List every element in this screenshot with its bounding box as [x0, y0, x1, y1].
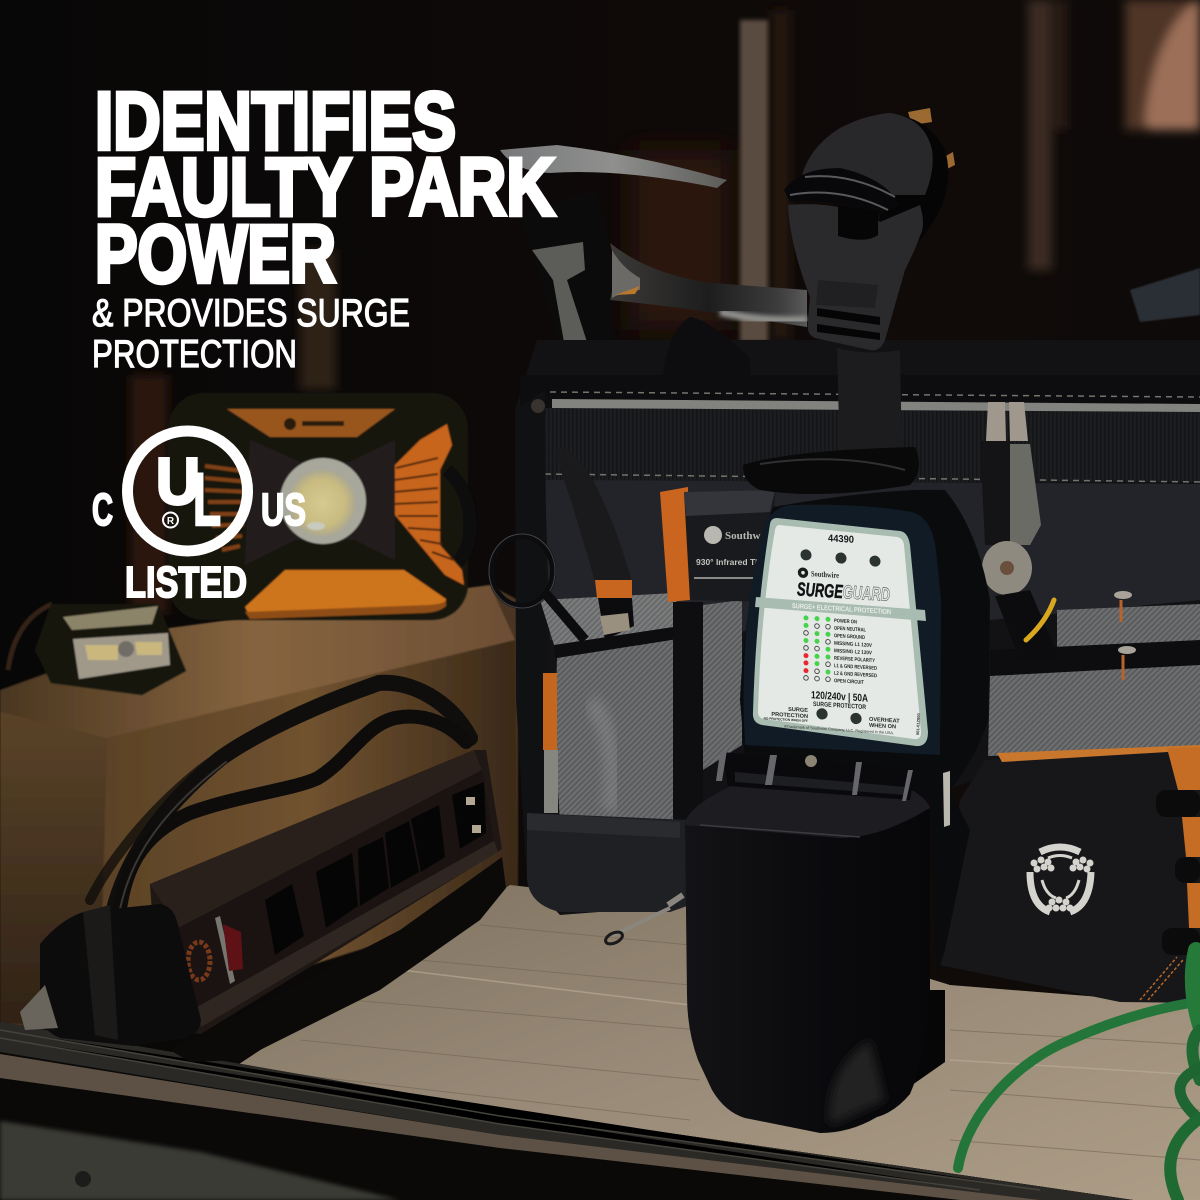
metal lower rail [0, 1121, 400, 1200]
model number: 44390 [828, 533, 854, 546]
work light brand mark [284, 418, 344, 430]
bag rivet [531, 399, 545, 413]
bag base [527, 813, 690, 912]
pouch with logo [940, 745, 1200, 1003]
strip logo [188, 942, 210, 980]
device lid lower reflection [830, 1040, 885, 1125]
surge protection caption [764, 705, 808, 723]
hammer pick head [500, 145, 727, 188]
rating caption: SURGE PROTECTOR [813, 701, 866, 711]
bag zipper stripe [552, 399, 1200, 412]
plier tips [986, 402, 1028, 441]
ul ring [128, 431, 248, 551]
strip mat [170, 857, 506, 1062]
ul listed badge: L [193, 458, 221, 541]
plier pivot [982, 541, 1032, 595]
surge protection caption: NO PROTECTION WHEN OFF [764, 716, 808, 723]
bag middle mesh pocket [703, 600, 742, 770]
background pillar [740, 20, 768, 342]
thermometer brand: Southw [725, 530, 761, 542]
plier left jaw [980, 441, 1012, 545]
bag back gray tube [1130, 268, 1200, 322]
pouch orange trim [997, 745, 1200, 762]
bag left strap [515, 390, 548, 860]
subheading: PROTECTION [92, 333, 297, 376]
pliers [980, 402, 1060, 660]
rubber seal [0, 1022, 1133, 1200]
device hinges [716, 750, 913, 801]
wooden floor [230, 885, 1200, 1200]
strip end cap [40, 904, 201, 1046]
device hinge bar [722, 752, 915, 800]
work light handle [447, 470, 470, 562]
us mark: US [261, 484, 306, 535]
overheat caption [869, 717, 900, 731]
bag webbing [545, 408, 1200, 482]
device side sticker [943, 771, 950, 827]
plug slots [817, 308, 880, 340]
thermometer orange grip [660, 487, 690, 602]
device screw [805, 755, 817, 767]
pouch black loops [1156, 790, 1200, 955]
bag rivet stems [1121, 600, 1123, 680]
c mark: C [92, 484, 113, 535]
device collar [743, 447, 919, 494]
strip usb ports [466, 797, 481, 833]
led labels: MISSING L2 120V [834, 648, 872, 656]
bag stitch lines [523, 392, 1200, 800]
headline [95, 76, 555, 300]
led labels: POWER ON [834, 618, 857, 626]
lower indicators [816, 708, 862, 724]
small lantern [8, 604, 186, 695]
bag left seam [554, 626, 682, 660]
work light lens [280, 458, 366, 544]
rating: 120/240v | 50A [811, 689, 868, 705]
led labels: OPEN CIRCUIT [834, 678, 865, 686]
pouch logo [1030, 847, 1094, 912]
device label contents [764, 529, 900, 736]
knife orange band [595, 580, 632, 598]
second hammer [610, 243, 807, 327]
crate top face [0, 585, 515, 738]
plug dome [800, 113, 933, 195]
thermometer body [684, 490, 775, 602]
bag hand strap [663, 317, 750, 375]
strip top face [150, 750, 482, 928]
knife handle [557, 447, 632, 582]
surge protection caption: SURGE [788, 707, 808, 714]
overheat caption: OVERHEAT [869, 717, 900, 725]
work light x frame [245, 440, 395, 565]
led labels: REVERSE POLARITY [834, 656, 875, 664]
overheat caption: WHEN ON [869, 723, 896, 730]
bag vertical strap [673, 602, 703, 880]
bag right upper mesh [1057, 604, 1200, 652]
led grid [804, 615, 830, 682]
strip body [150, 750, 502, 1034]
bag light lower trim [544, 750, 558, 813]
knife clasp [600, 613, 630, 635]
bag top black band [520, 375, 1200, 412]
work light [168, 393, 470, 620]
chisel blade [532, 242, 598, 376]
bag body [515, 340, 1200, 915]
cords [90, 680, 470, 928]
top indicators [800, 549, 880, 567]
device cord [837, 348, 902, 462]
bag right seam [990, 640, 1200, 680]
listed caption: LISTED [125, 558, 247, 607]
southwire wordmark: Southwire [811, 569, 839, 580]
rail screw [75, 1171, 91, 1187]
tool bag [515, 268, 1200, 915]
subheading [92, 292, 410, 376]
wooden crate [0, 585, 518, 1030]
green extension cord [958, 950, 1200, 1200]
strip lower rail [197, 841, 498, 1027]
thermometer label: 930° Infrared Th [696, 557, 760, 567]
bag upper pocket [545, 480, 1200, 640]
surgeguard logo: SURGEGUARD [797, 579, 890, 606]
thermometer tool [660, 487, 775, 602]
plier yellow grip [1026, 600, 1054, 640]
led labels: OPEN NEUTRAL [834, 626, 867, 634]
plier handles [995, 590, 1060, 660]
power strip with cords [20, 680, 506, 1062]
bag left mesh pocket [556, 638, 684, 825]
surge guard device [685, 108, 990, 1133]
device side shell [740, 490, 990, 975]
work light bottom orange panel [245, 570, 446, 617]
bag orange trim [543, 673, 557, 750]
device plug head [784, 108, 955, 350]
led labels: OPEN GROUND [834, 633, 865, 641]
headline: IDENTIFIES [95, 76, 456, 167]
crate front face [0, 712, 107, 1024]
work light top orange panel [227, 409, 395, 437]
work light right fins [394, 424, 464, 585]
ul letters: U [156, 444, 200, 518]
plug socket hole [838, 205, 878, 240]
work light left fins [205, 466, 250, 550]
strip outlets [265, 782, 486, 955]
device panel frame [744, 505, 941, 755]
scissor ring [491, 536, 553, 606]
plug face [788, 204, 923, 350]
device label inner [758, 525, 921, 739]
part number: 561-01Z900 [915, 712, 921, 735]
plier right jaw [1010, 444, 1041, 545]
hammer and chisel [500, 145, 807, 376]
plug back [880, 114, 948, 260]
led labels: L2 & GND REVERSED [834, 671, 877, 679]
band caption: SURGE+ ELECTRICAL PROTECTION [792, 603, 891, 616]
trademark line: ®Trademark of Southwire Company, LLC. Registered in the USA. [784, 725, 894, 735]
device lid [685, 785, 930, 1133]
bag rivets [1114, 591, 1136, 654]
strip face [178, 770, 494, 1007]
device lid highlight [700, 825, 860, 837]
carabiner clip [604, 895, 683, 946]
strip red switch [223, 924, 243, 971]
plug ratings plate [816, 280, 878, 308]
hammer neck [520, 190, 612, 376]
pouch orange stitching [1140, 957, 1183, 1000]
headline block [92, 76, 555, 376]
sandy edge strip [0, 1054, 1040, 1200]
ul listed badge [92, 431, 306, 607]
device rear foot [905, 990, 945, 1090]
led labels: MISSING L1 120V [834, 641, 872, 649]
thermometer logo [704, 526, 722, 544]
led labels [834, 618, 877, 687]
strip end plug [20, 985, 58, 1030]
crate side face [100, 640, 518, 1000]
bag right mesh pocket [988, 665, 1200, 756]
headline: POWER [95, 209, 336, 300]
rail dark base [0, 1022, 1133, 1200]
device label outer [753, 518, 928, 746]
led labels: L1 & GND REVERSED [834, 663, 877, 672]
utility knife and scissors [489, 447, 634, 640]
surge protection caption: PROTECTION [771, 712, 808, 720]
crate base fill [0, 585, 518, 1030]
pouch orange panels [1167, 747, 1200, 928]
bag left upper mesh [540, 593, 680, 648]
plug prongs [908, 108, 955, 170]
plug ridges [784, 168, 900, 215]
ul registered mark: R [167, 516, 175, 527]
front rail of truck bed [0, 1022, 1133, 1200]
subheading: & PROVIDES SURGE [92, 292, 410, 335]
southwire logo [798, 567, 808, 578]
device label band [755, 597, 926, 621]
pouch body [940, 748, 1200, 1003]
knife dark shank [598, 598, 634, 640]
ul registered mark [163, 512, 178, 528]
device lid top face [685, 785, 930, 838]
strip switch plate [215, 916, 235, 984]
headline: FAULTY PARK [95, 142, 555, 233]
